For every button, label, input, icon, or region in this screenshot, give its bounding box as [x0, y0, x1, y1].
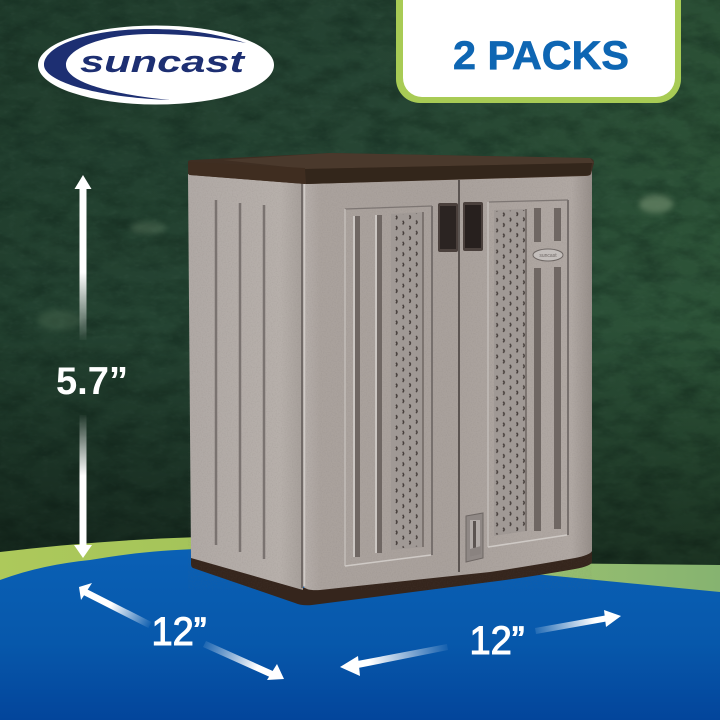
badge text: 2 PACKS: [453, 34, 629, 78]
depth arrow: [79, 583, 284, 680]
right door panel: [488, 200, 568, 547]
surface grain: [188, 170, 592, 590]
door seam: [458, 180, 460, 572]
storage cabinet: [188, 153, 594, 605]
left door panel: [345, 206, 432, 566]
door handles: [438, 202, 483, 252]
height arrow: [74, 175, 92, 558]
cabinet lid: [188, 153, 594, 184]
left side grooves: [216, 200, 264, 559]
depth label: 12”: [152, 610, 206, 654]
green ground swoosh right: [530, 563, 720, 600]
corner edge: [301, 183, 303, 588]
Suncast logo: [38, 26, 274, 104]
pack count badge: [396, 0, 681, 103]
green ground swoosh left: [0, 537, 200, 590]
logo swoosh: [44, 29, 246, 100]
cabinet front: [303, 170, 592, 590]
cabinet badge: [533, 249, 563, 261]
right perforated panel: [494, 209, 526, 536]
width arrow: [340, 610, 621, 676]
door latch: [466, 513, 483, 562]
width label: 12”: [470, 619, 524, 663]
blue ground: [0, 549, 720, 720]
cabinet left side: [188, 174, 303, 590]
cabinet badge: suncast: [539, 253, 557, 259]
left perforated panel: [391, 212, 423, 550]
cabinet base: [191, 552, 592, 605]
height label: 5.7”: [56, 360, 128, 403]
logo wordmark: suncast: [80, 44, 246, 79]
